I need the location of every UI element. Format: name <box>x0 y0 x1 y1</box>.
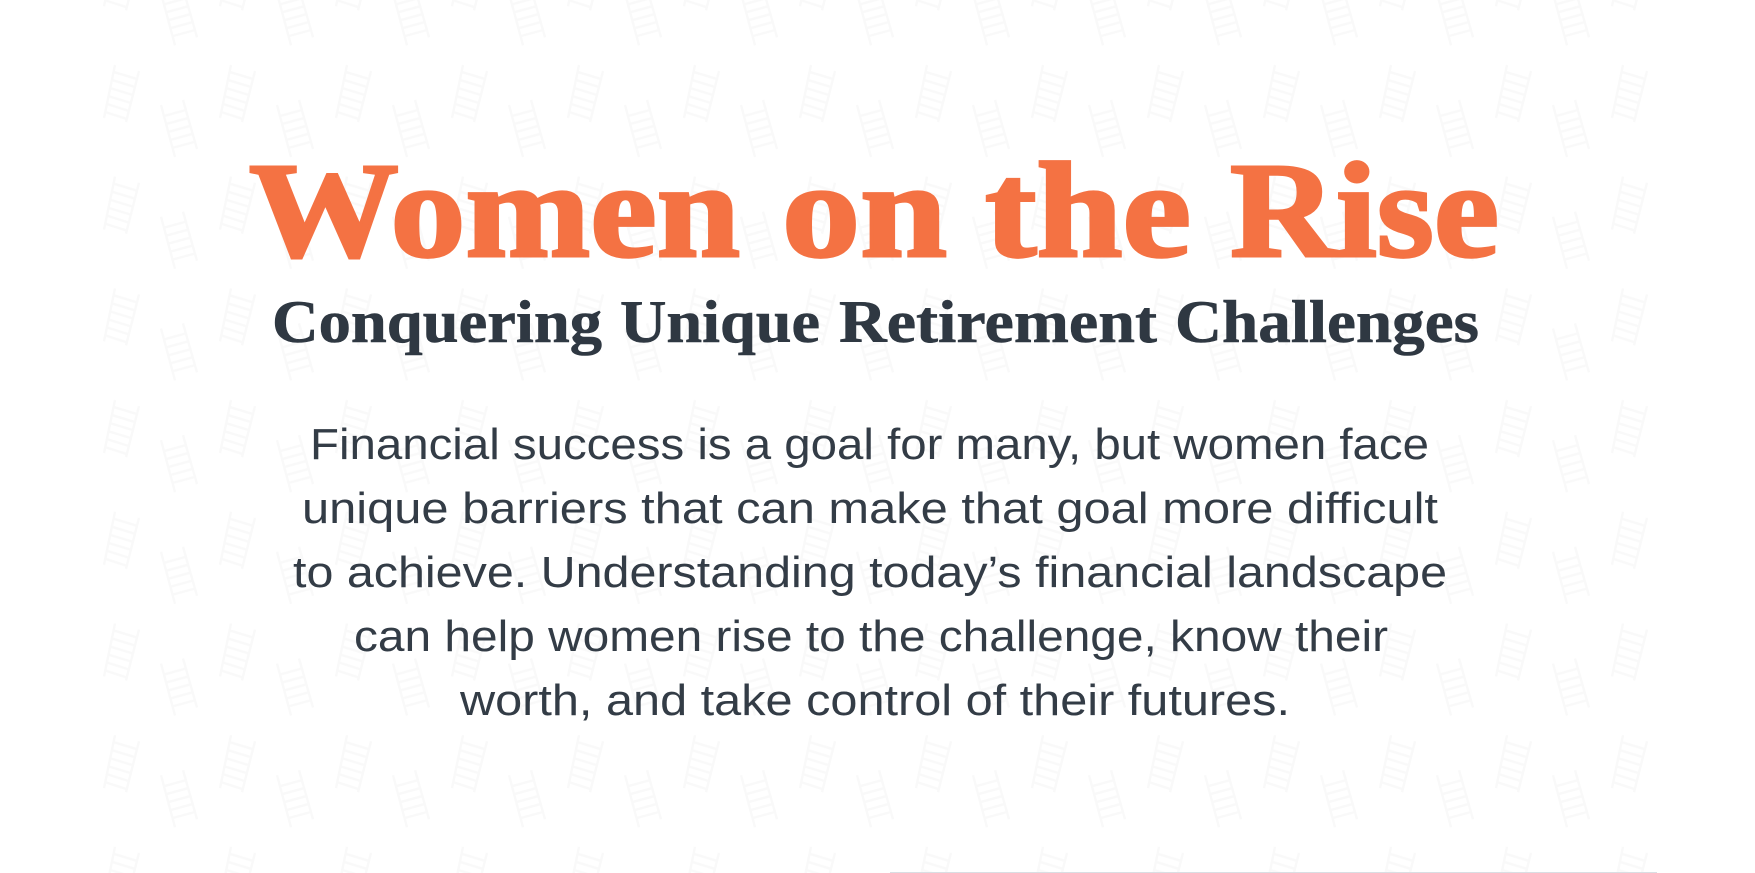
title: Women <box>249 136 740 286</box>
intro paragraph <box>293 420 1447 725</box>
intro paragraph: Financial success is a goal for many, but women face <box>310 420 1429 469</box>
subtitle: Unique <box>620 289 820 355</box>
title <box>249 136 1499 286</box>
subtitle: Challenges <box>1175 289 1479 355</box>
subtitle: Conquering <box>272 289 602 355</box>
intro paragraph: worth, and take control of their futures. <box>459 676 1290 725</box>
subtitle: Retirement <box>839 289 1157 355</box>
intro paragraph: unique barriers that can make that goal more difficult <box>302 484 1438 533</box>
title: the <box>985 136 1191 286</box>
title: Rise <box>1230 136 1499 286</box>
subtitle <box>272 289 1479 355</box>
intro paragraph: can help women rise to the challenge, know their <box>354 612 1388 661</box>
intro paragraph: to achieve. Understanding today’s financial landscape <box>293 548 1447 597</box>
title: on <box>782 136 947 286</box>
